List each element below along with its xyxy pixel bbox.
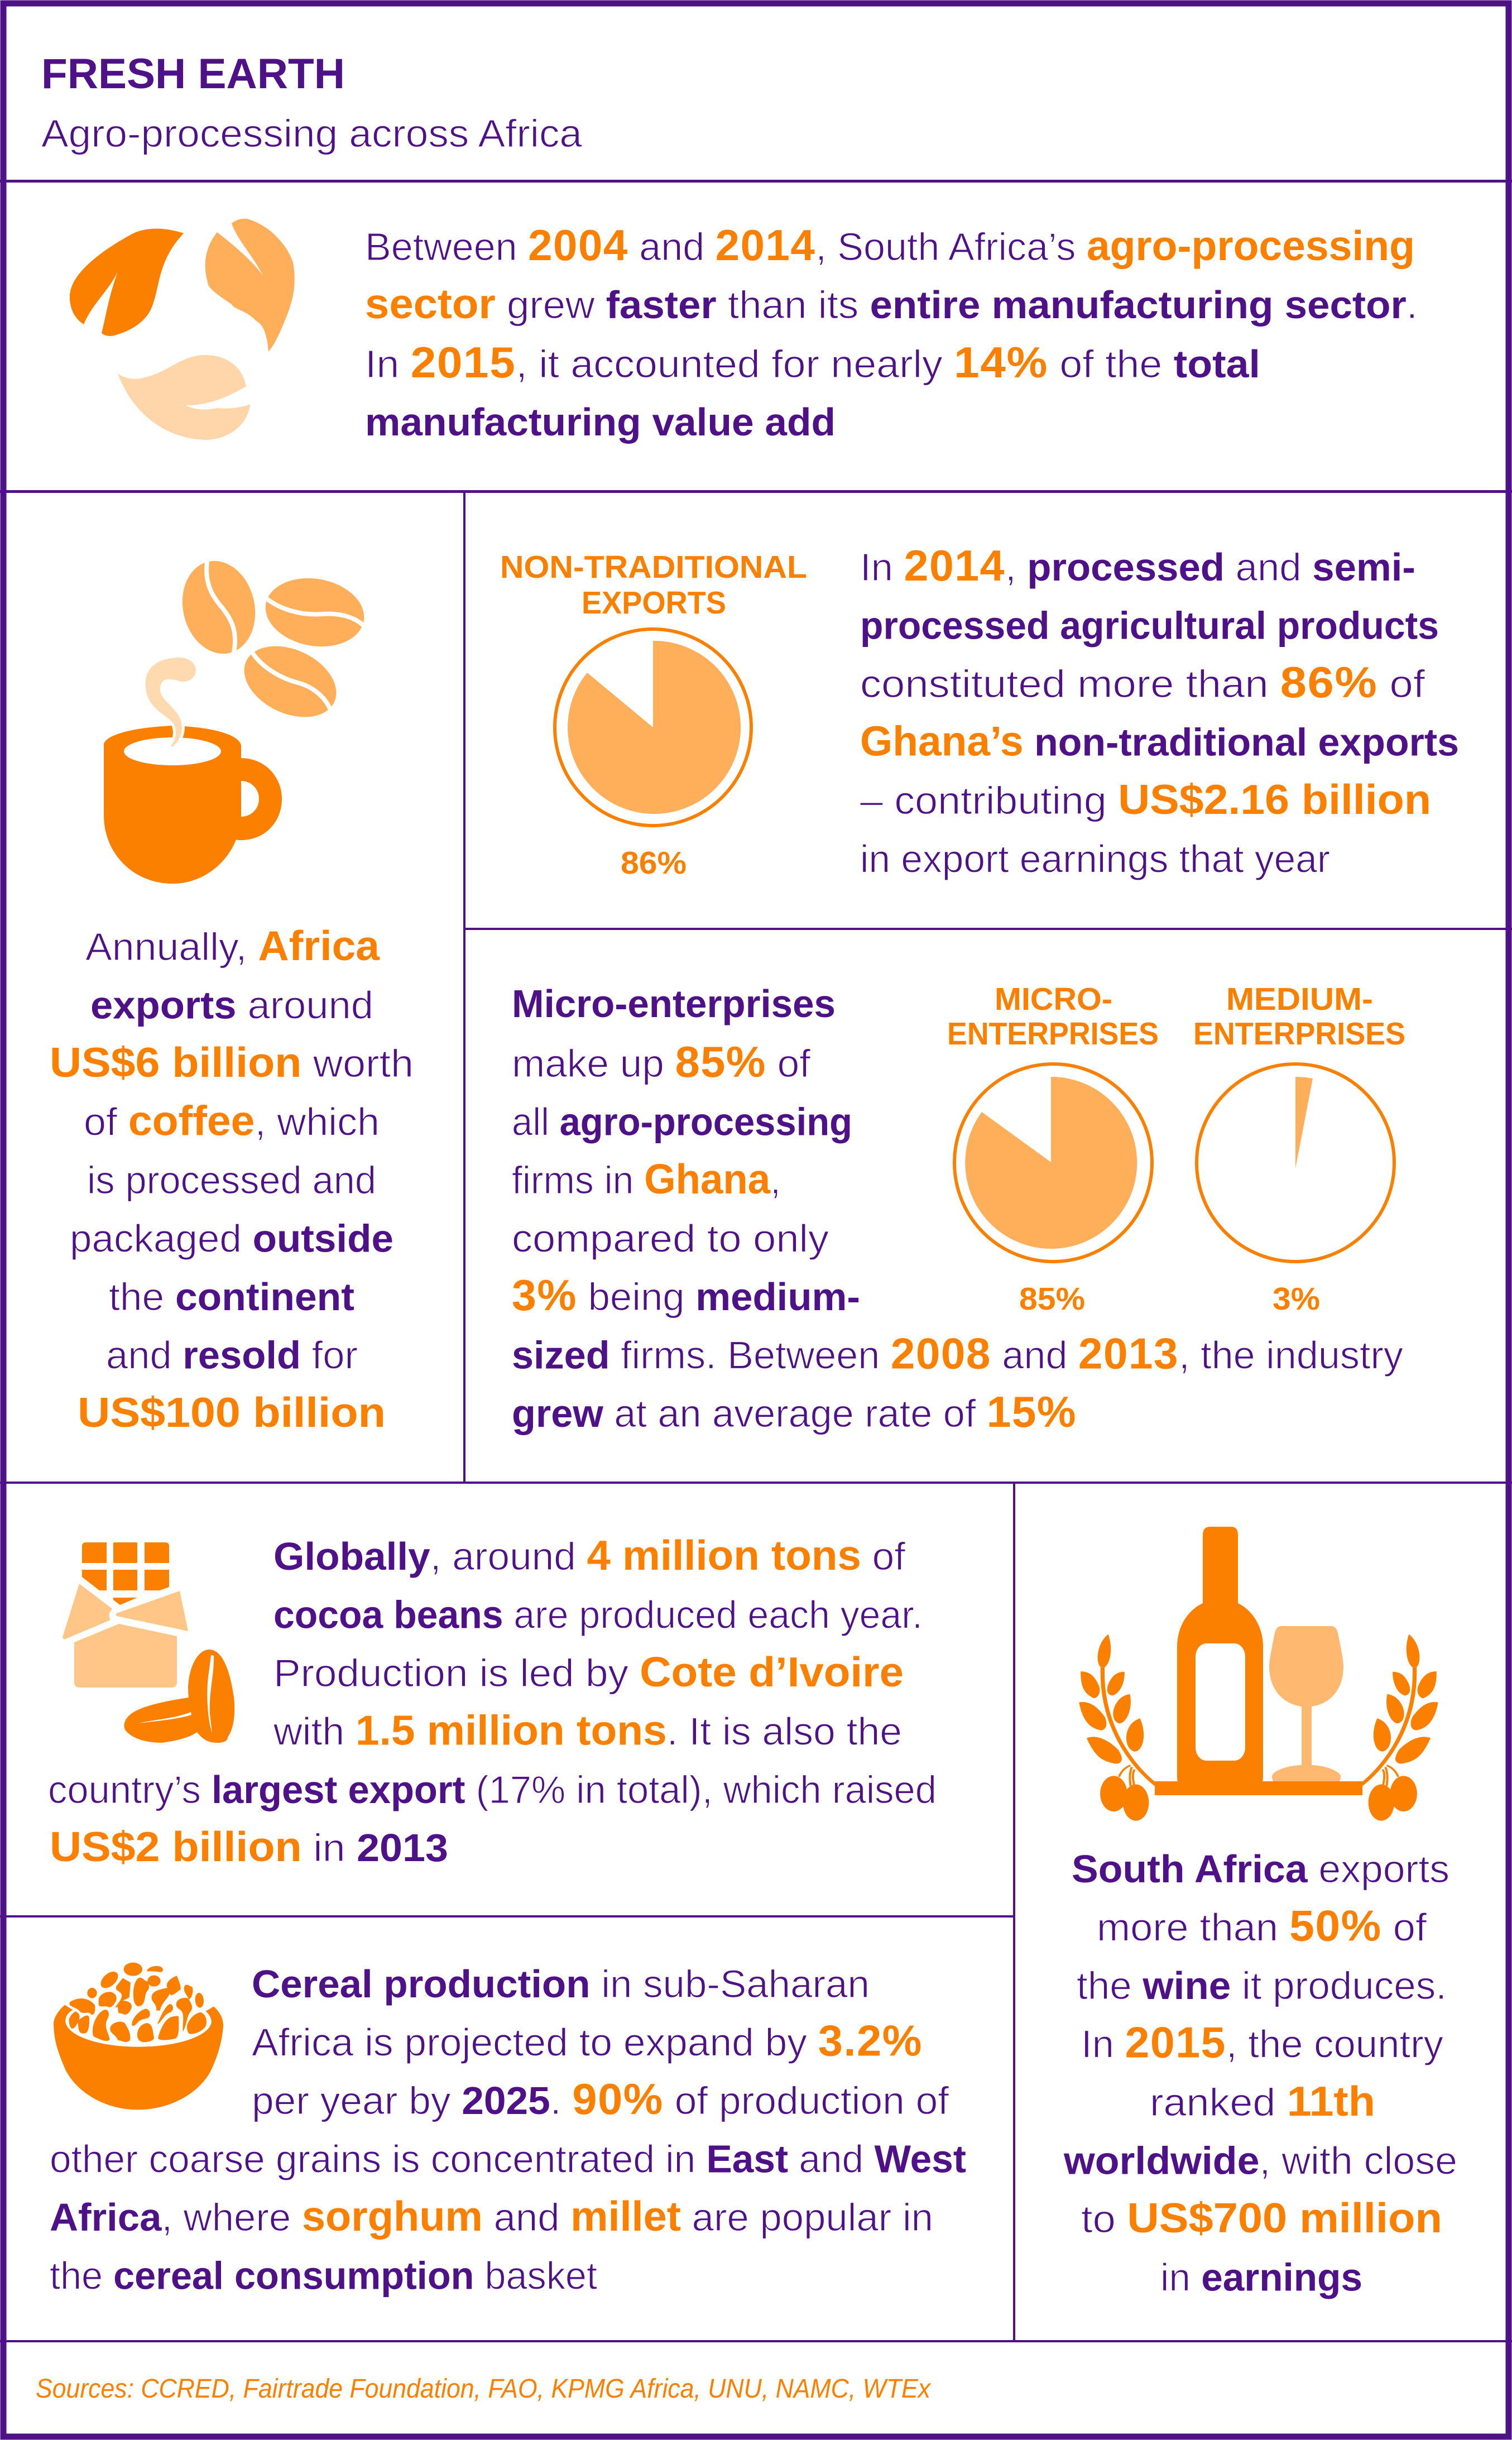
- heading: Fresh Earth: FRESH EARTH: [41, 50, 345, 98]
- chart: non-traditional exports pie: [500, 549, 807, 881]
- coffee beans: [174, 554, 369, 731]
- text: micro-enterprises: sized firms. Between 2008 and 2013, the industry: [512, 1329, 1403, 1378]
- icon: three leaves: [70, 219, 295, 440]
- text: cereal production: [50, 1962, 966, 2298]
- text: coffee exports: exports around: [90, 984, 373, 1027]
- cup: [104, 726, 282, 884]
- value: 3%: [1273, 1281, 1320, 1317]
- sources: Sources: CCRED, Fairtrade Foundation, FAO, KPMG Africa, UNU, NAMC, WTEx: [36, 2374, 932, 2404]
- text: Ghana exports: constituted more than 86% of: [860, 658, 1425, 707]
- text: cereal production: Cereal production in sub-Saharan: [252, 1962, 870, 2006]
- text: micro-enterprises: 3% being medium-: [512, 1271, 860, 1320]
- text: cocoa production: US$2 billion in 2013: [50, 1823, 448, 1870]
- panel: coffee: [50, 554, 414, 1436]
- text: coffee exports: of coffee, which: [84, 1097, 380, 1144]
- pie slice 85%: [965, 1077, 1137, 1249]
- text: micro-enterprises: [512, 982, 1403, 1436]
- pie slice 86%: [568, 641, 741, 814]
- text: micro-enterprises: all agro-processing: [512, 1100, 852, 1143]
- text: cocoa production: Globally, around 4 million tons of: [273, 1532, 906, 1579]
- chart: micro-enterprises pie: [947, 981, 1159, 1317]
- chart label line 2: ENTERPRISES: [1193, 1016, 1405, 1052]
- text: cocoa production: with 1.5 million tons. It is also the: [273, 1707, 902, 1754]
- chocolate squares: [82, 1542, 169, 1605]
- text: coffee exports: US$100 billion: [78, 1389, 386, 1436]
- title: [41, 50, 582, 155]
- text: coffee exports: [50, 922, 414, 1436]
- text: Ghana exports: [860, 541, 1459, 881]
- text: cocoa production: country’s largest export (17% in total), which raised: [48, 1768, 937, 1811]
- panel: Ghana non-traditional exports: [500, 541, 1459, 881]
- text: cocoa production: [48, 1532, 937, 1870]
- text: agro-processing growth: Between 2004 and 2014, South Africa’s agro-processing: [365, 220, 1415, 270]
- wrapper: [63, 1584, 188, 1688]
- text: Ghana exports: Ghana’s non-traditional exports: [860, 718, 1459, 765]
- text: cereal production: other coarse grains is concentrated in East and West: [50, 2137, 966, 2180]
- panel: Ghana micro-enterprises: [512, 981, 1405, 1436]
- text: wine exports: In 2015, the country: [1081, 2017, 1443, 2067]
- text: cereal production: the cereal consumption basket: [50, 2254, 597, 2298]
- panel: cereal: [50, 1962, 966, 2298]
- text: wine exports: the wine it produces.: [1077, 1964, 1447, 2007]
- text: agro-processing growth: sector grew faster than its entire manufacturing sector .: [365, 280, 1418, 327]
- text: wine exports: more than 50% of: [1097, 1901, 1427, 1950]
- icon: bowl of grain: [54, 1963, 223, 2110]
- panel: cocoa: [48, 1532, 937, 1870]
- text: coffee exports: US$6 billion worth: [50, 1039, 414, 1086]
- panel: wine: [1063, 1527, 1457, 2299]
- chart label: NON-TRADITIONAL: [500, 549, 807, 585]
- text: wine exports: in earnings: [1160, 2255, 1362, 2299]
- text: cereal production: Africa is projected to expand by 3.2%: [252, 2016, 923, 2065]
- value: 86%: [621, 845, 687, 881]
- text: cereal production: Africa, where sorghum and millet are popular in: [50, 2193, 933, 2240]
- icon: chocolate bar with cocoa beans: [63, 1542, 234, 1743]
- chart label: MEDIUM-: [1226, 981, 1373, 1017]
- text: wine exports: [1063, 1847, 1457, 2299]
- text: micro-enterprises: Micro-enterprises: [512, 982, 836, 1025]
- text: agro-processing growth: manufacturing value add: [365, 400, 836, 444]
- text: wine exports: South Africa exports: [1072, 1847, 1449, 1891]
- chart label line 2: ENTERPRISES: [947, 1016, 1159, 1052]
- icon: coffee cup with beans: [104, 554, 369, 884]
- text: micro-enterprises: firms in Ghana,: [512, 1156, 781, 1202]
- cocoa beans: [124, 1650, 234, 1743]
- text: cocoa production: cocoa beans are produced each year.: [273, 1593, 923, 1637]
- text: coffee exports: is processed and: [87, 1158, 376, 1202]
- right laurel: [1360, 1634, 1438, 1821]
- chart label: MICRO-: [995, 981, 1112, 1017]
- wine glass: [1269, 1626, 1343, 1782]
- text: agro-processing growth: [365, 220, 1418, 444]
- text: wine exports: ranked 11th: [1150, 2078, 1375, 2125]
- value: 85%: [1019, 1281, 1085, 1317]
- bottle: [1177, 1527, 1263, 1785]
- text: micro-enterprises: make up 85% of: [512, 1037, 811, 1086]
- text: cocoa production: Production is led by Cote d’Ivoire: [273, 1648, 904, 1695]
- panel: South Africa agro-processing: [70, 219, 1418, 444]
- text: cereal production: per year by 2025. 90% of production of: [252, 2074, 949, 2123]
- left laurel: [1079, 1634, 1158, 1821]
- text: Ghana exports: – contributing US$2.16 billion: [860, 776, 1431, 823]
- text: Ghana exports: In 2014, processed and semi-: [860, 541, 1415, 590]
- text: coffee exports: packaged outside: [70, 1217, 393, 1260]
- pie slice 3%: [1295, 1077, 1313, 1168]
- text: agro-processing growth: In 2015, it accounted for nearly 14% of the total: [365, 338, 1260, 387]
- text: micro-enterprises: compared to only: [512, 1217, 829, 1260]
- text: coffee exports: the continent: [109, 1275, 354, 1319]
- chart: medium-enterprises pie: [1193, 981, 1405, 1317]
- text: wine exports: worldwide, with close: [1063, 2139, 1457, 2183]
- text: wine exports: to US$700 million: [1081, 2194, 1442, 2241]
- shelf: [1155, 1781, 1362, 1795]
- steam: [146, 658, 196, 747]
- text: coffee exports: and resold for: [106, 1333, 358, 1377]
- text: coffee exports: Annually, Africa: [85, 922, 380, 969]
- chart label line 2: EXPORTS: [582, 585, 726, 621]
- text: micro-enterprises: grew at an average rate of 15%: [512, 1387, 1077, 1436]
- subheading: Agro-processing across Africa: [41, 112, 582, 155]
- icon: wine bottle, glass and laurels: [1079, 1527, 1438, 1821]
- text: Ghana exports: in export earnings that year: [860, 837, 1330, 881]
- text: Ghana exports: processed agricultural products: [860, 604, 1439, 648]
